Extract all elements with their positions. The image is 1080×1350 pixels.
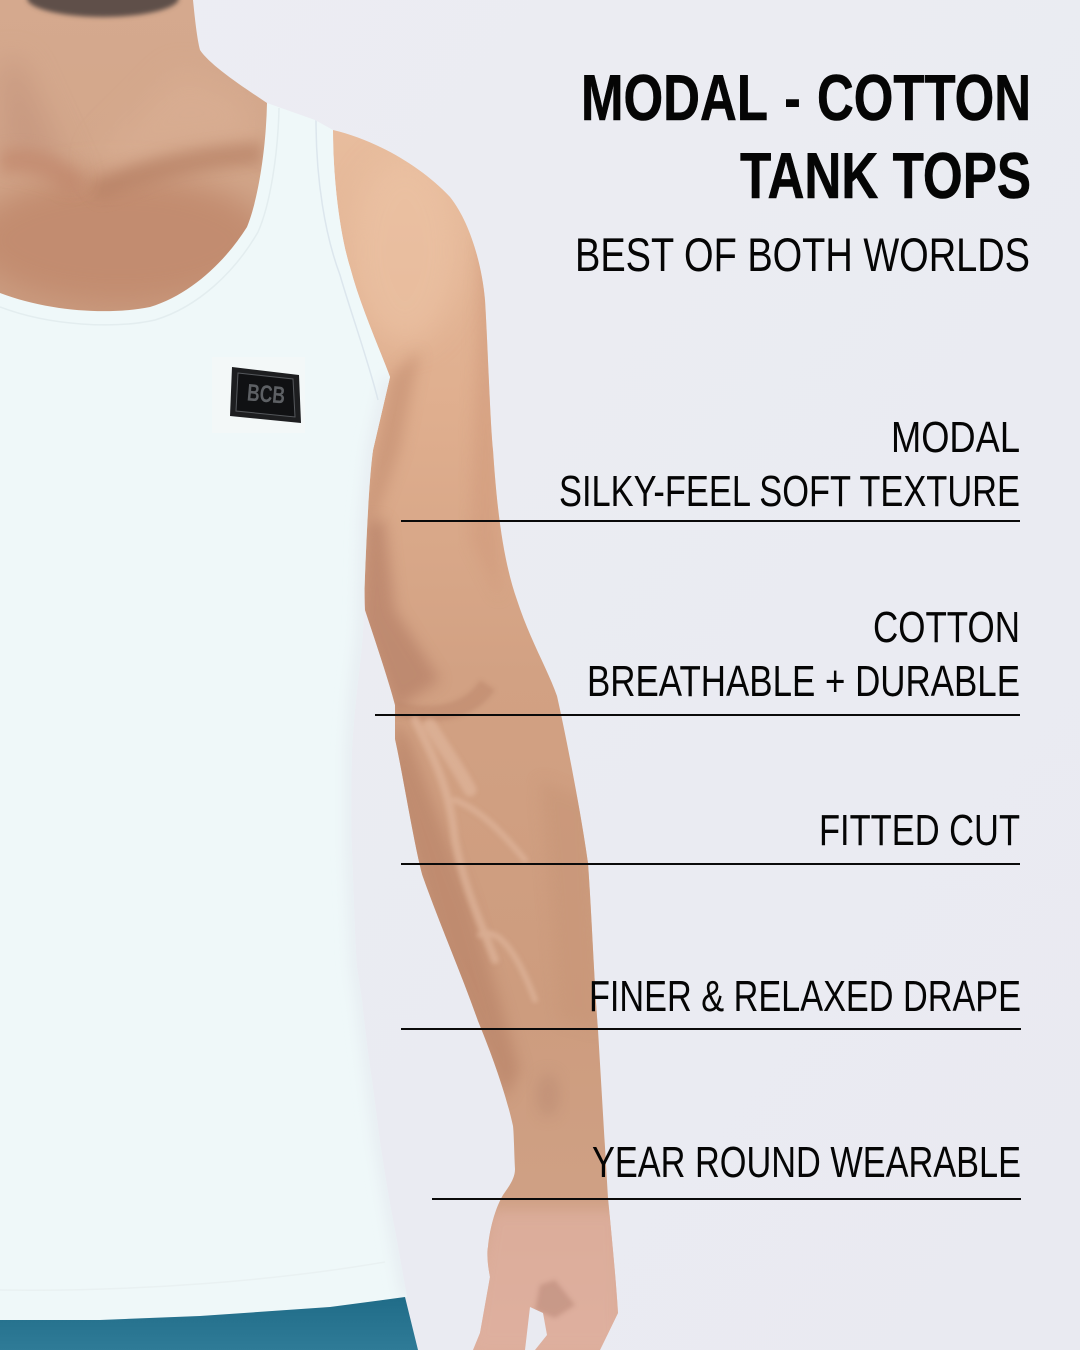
title line 1 xyxy=(581,61,1031,134)
neckline seam xyxy=(0,108,279,325)
title line 1: - xyxy=(784,61,801,134)
inner arm shade xyxy=(360,520,440,710)
finger gap xyxy=(525,1307,547,1350)
arm xyxy=(330,120,630,1350)
hem seam xyxy=(0,1262,385,1290)
feature: cotton: COTTON xyxy=(873,603,1020,652)
beard shadow xyxy=(27,0,179,17)
shoulder highlight xyxy=(365,231,444,333)
elbow crease xyxy=(395,680,495,721)
neck hollow shadow xyxy=(4,78,52,148)
neck and chest skin xyxy=(0,0,267,312)
forearm right tone xyxy=(576,794,598,1022)
shorts xyxy=(0,1297,418,1350)
chest label patch: BCB xyxy=(246,379,286,410)
feature: modal xyxy=(401,413,1020,522)
collarbone highlight xyxy=(100,70,260,180)
armpit shade xyxy=(368,356,418,516)
forearm veins xyxy=(415,720,535,1000)
knuckle shadow xyxy=(535,1280,575,1318)
armhole seam xyxy=(316,120,378,400)
chest label patch xyxy=(212,357,305,433)
tank top xyxy=(0,103,406,1320)
title line 1: MODAL xyxy=(581,61,768,134)
feature: fitted cut: FITTED CUT xyxy=(819,806,1020,855)
collarbone shadow xyxy=(98,139,264,192)
right arm shade xyxy=(476,260,500,540)
hand tone xyxy=(470,1210,620,1350)
feature: cotton xyxy=(375,603,1020,716)
feature: modal: MODAL xyxy=(891,413,1020,462)
title xyxy=(581,61,1031,212)
forearm left shade xyxy=(390,720,520,1100)
side edge fade xyxy=(364,398,386,586)
wrist vein shadow xyxy=(541,1082,555,1108)
chest redness xyxy=(0,175,270,305)
photo: model wearing tank top xyxy=(0,0,630,1350)
